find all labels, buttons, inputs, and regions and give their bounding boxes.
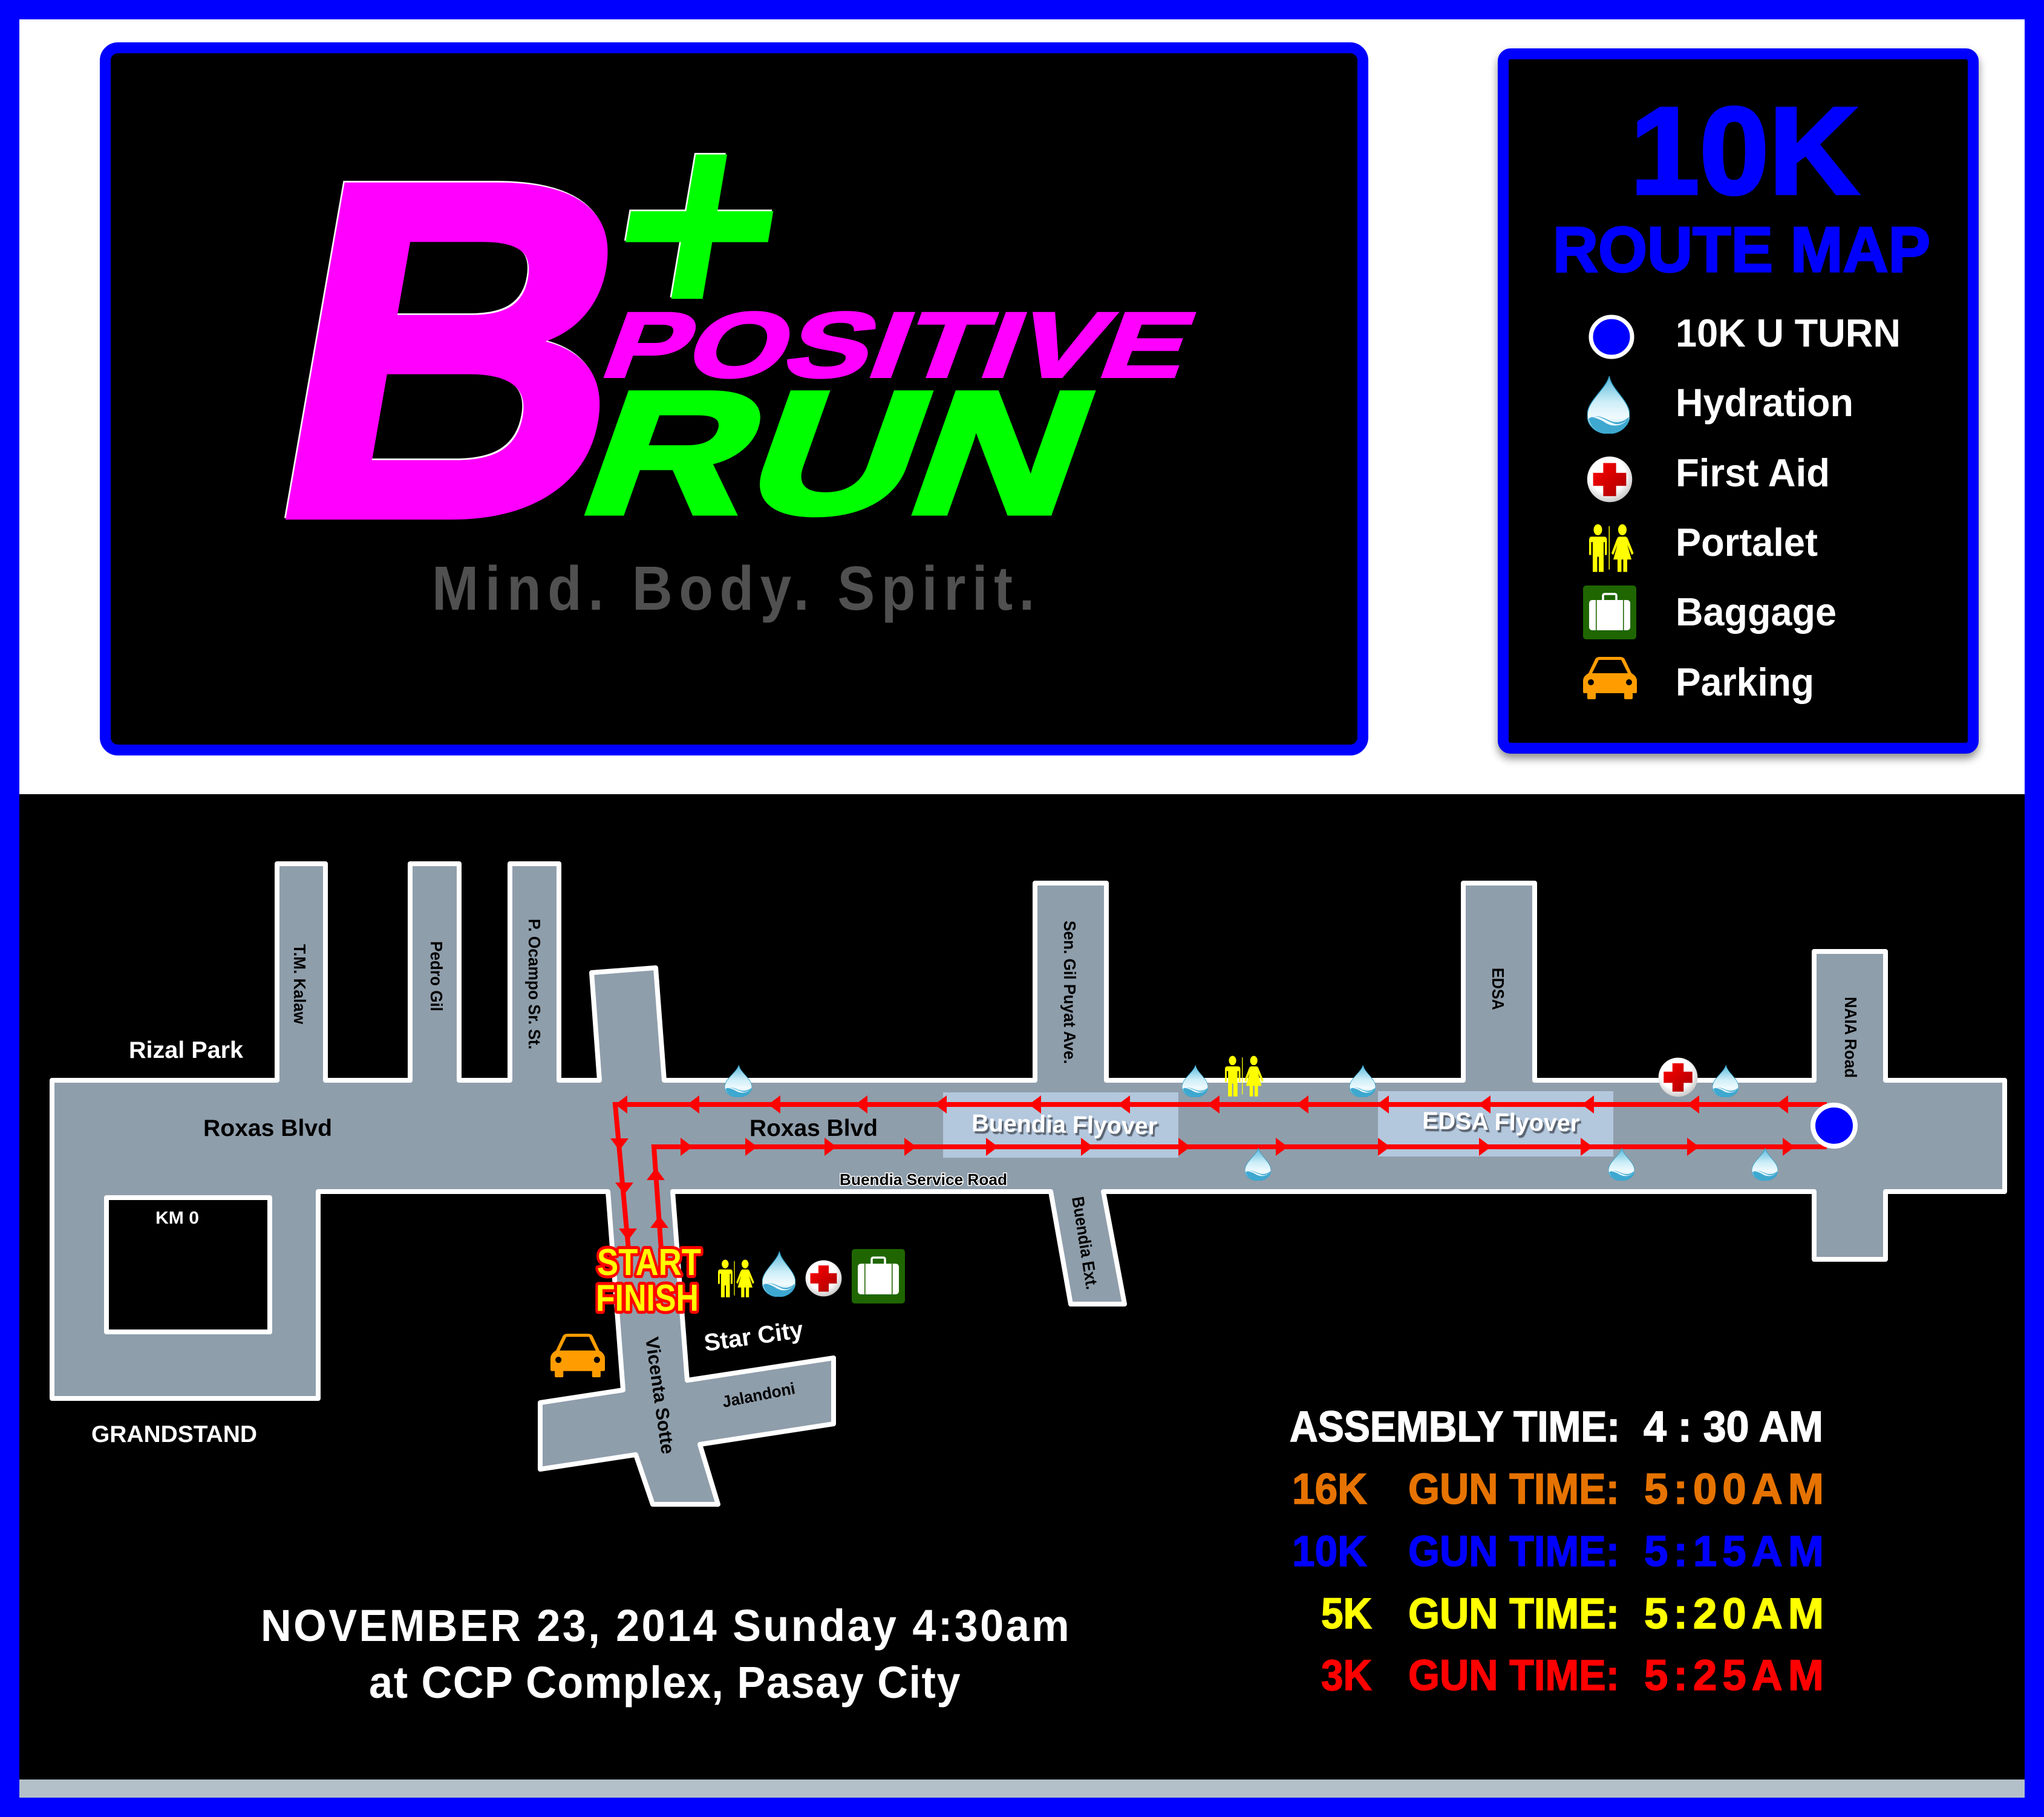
icon: 10K U-turn marker	[1813, 1105, 1855, 1146]
3K gun time: 5:25AM	[1644, 1652, 1824, 1700]
assembly time: 4 : 30 AM	[1644, 1403, 1823, 1451]
10K gun time: 10K	[1292, 1528, 1367, 1576]
panel: route map legend	[1503, 54, 1973, 748]
5K gun time: 5:20AM	[1644, 1590, 1824, 1638]
map: road labels: NAIA Road	[1841, 997, 1860, 1078]
3K gun time: GUN TIME:	[1408, 1652, 1619, 1700]
3K gun time: 3K	[1321, 1652, 1372, 1700]
map: place labels: GRANDSTAND	[91, 1421, 257, 1447]
legend: baggage	[1583, 586, 1837, 639]
map: road labels: Sen. Gil Puyat Ave.	[1060, 921, 1079, 1064]
map: road labels: Buendia Service Road	[840, 1170, 1007, 1189]
10K gun time: GUN TIME:	[1408, 1528, 1619, 1576]
logo: RUN: RUN	[560, 356, 1120, 550]
map: road labels: Jalandoni	[720, 1379, 797, 1411]
map: place labels	[91, 1037, 805, 1447]
icons: start area services	[718, 1249, 905, 1303]
map: place labels: Rizal Park	[129, 1037, 243, 1063]
icons: hydration stations along route	[725, 1065, 1778, 1181]
text: event date and venue: at CCP Complex, Pasay City	[369, 1658, 961, 1708]
panel: logo	[105, 48, 1363, 750]
heading: route map: ROUTE MAP	[1553, 214, 1930, 285]
map: road labels: Roxas Blvd	[749, 1115, 878, 1141]
map: road labels: Roxas Blvd	[203, 1115, 332, 1141]
logo: plus sign: +	[590, 64, 810, 382]
5K gun time: GUN TIME:	[1408, 1590, 1619, 1638]
3K gun time	[1321, 1652, 1824, 1700]
legend: hydration: Hydration	[1676, 380, 1853, 425]
text: event date and venue: NOVEMBER 23, 2014 Sunday 4:30am	[261, 1601, 1069, 1651]
16K gun time: 5:00AM	[1644, 1466, 1824, 1513]
map: road labels: T.M. Kalaw	[290, 944, 309, 1024]
map: road network	[52, 864, 2005, 1504]
assembly time	[1290, 1403, 1823, 1451]
16K gun time: GUN TIME:	[1408, 1466, 1619, 1513]
map: flyover labels: Buendia Flyover	[971, 1110, 1158, 1140]
map: road labels	[203, 919, 1860, 1455]
map: place labels: Star City	[702, 1316, 805, 1357]
legend: portalet	[1589, 520, 1818, 572]
label: start / finish: START	[597, 1242, 701, 1284]
logo: POSITIVE: POSITIVE	[590, 293, 1209, 397]
panel: map background	[19, 794, 2025, 1798]
icon: first aid on route	[1659, 1058, 1697, 1097]
legend: first aid	[1587, 451, 1830, 502]
text: event date and venue	[261, 1601, 1069, 1708]
heading: 10K: 10K	[1630, 82, 1859, 220]
map: flyover labels: EDSA Flyover	[1422, 1107, 1580, 1137]
5K gun time: 5K	[1321, 1590, 1372, 1638]
map: road labels: Buendia Ext.	[1068, 1195, 1102, 1291]
map: flyover overlays	[943, 1091, 1613, 1158]
map: road labels: P. Ocampo Sr. St.	[525, 919, 544, 1049]
legend: parking: Parking	[1676, 660, 1814, 704]
label: start / finish: FINISH	[596, 1277, 699, 1319]
map: road labels: EDSA	[1489, 968, 1507, 1010]
16K gun time	[1292, 1466, 1824, 1513]
legend: hydration	[1587, 376, 1853, 434]
legend: 10K U turn: 10K U TURN	[1676, 311, 1901, 355]
legend: 10K U turn	[1591, 311, 1901, 357]
legend: parking	[1583, 657, 1814, 704]
legend: first aid: First Aid	[1676, 451, 1830, 495]
map: flyover labels	[971, 1107, 1580, 1140]
16K gun time: 16K	[1292, 1466, 1367, 1513]
legend: baggage: Baggage	[1676, 590, 1837, 634]
logo: B: B	[241, 83, 674, 617]
label: start / finish	[596, 1242, 701, 1319]
5K gun time	[1321, 1590, 1824, 1638]
text: assembly and gun times	[1290, 1403, 1824, 1700]
map: road labels: Pedro Gil	[427, 941, 446, 1011]
assembly time: ASSEMBLY TIME:	[1290, 1403, 1620, 1451]
route: inbound line with arrows pointing left and down	[610, 1095, 1827, 1250]
tagline: Mind. Body. Spirit.	[432, 553, 1034, 623]
map: place labels: KM 0	[155, 1209, 199, 1228]
legend: portalet: Portalet	[1676, 520, 1818, 564]
icon: portalet on route	[1225, 1056, 1264, 1097]
map: road labels: Vicenta Sotte	[641, 1336, 679, 1455]
route: outward line with arrows pointing right and up	[647, 1138, 1827, 1250]
icon: parking	[550, 1334, 605, 1377]
10K gun time: 5:15AM	[1644, 1528, 1824, 1576]
10K gun time	[1292, 1528, 1824, 1576]
